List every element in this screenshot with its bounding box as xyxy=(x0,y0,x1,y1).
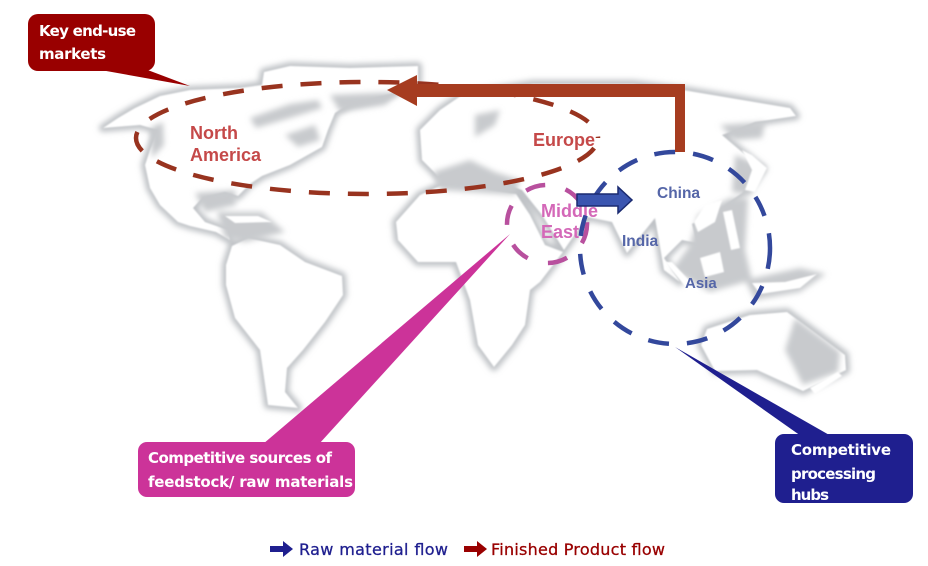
icon: finished product arrow xyxy=(464,541,487,557)
callout: key end-use markets: markets xyxy=(39,45,106,63)
callout: competitive processing hubs: processing xyxy=(791,465,876,483)
callout: competitive processing hubs: hubs xyxy=(791,486,829,504)
callout: competitive processing hubs xyxy=(675,347,913,504)
label: Middle East: Middle xyxy=(541,201,598,221)
label: North America: North xyxy=(190,123,238,143)
legend xyxy=(270,540,665,559)
label: Europe: Europe xyxy=(533,130,595,150)
callout: competitive sources of feedstock: Competitive sources of xyxy=(148,449,332,467)
callout: competitive processing hubs: Competitive xyxy=(791,441,891,459)
icon: raw material arrow xyxy=(270,541,293,557)
callout: key end-use markets xyxy=(28,14,190,86)
callout: key end-use markets: Key end-use xyxy=(39,22,136,40)
callout: competitive sources of feedstock: feedstock/ raw materials xyxy=(148,473,353,491)
arrow: finished product flow on map xyxy=(387,75,685,152)
label: China: China xyxy=(657,185,700,202)
callout: competitive sources of feedstock xyxy=(138,234,510,497)
dashed ellipse: Middle East xyxy=(507,185,587,263)
label: India: India xyxy=(622,233,659,250)
world map xyxy=(103,66,846,408)
legend text: raw material flow: Raw material flow xyxy=(299,540,448,559)
label: Asia: Asia xyxy=(685,275,717,292)
label: Middle East second line: East xyxy=(541,222,579,242)
dashed circle: processing hubs xyxy=(580,152,770,344)
label: North America second line: America xyxy=(190,145,262,165)
arrow: raw material flow on map xyxy=(577,187,632,213)
legend text: finished product flow: Finished Product flow xyxy=(491,540,665,559)
dashed ellipse: key end-use markets xyxy=(136,82,598,194)
